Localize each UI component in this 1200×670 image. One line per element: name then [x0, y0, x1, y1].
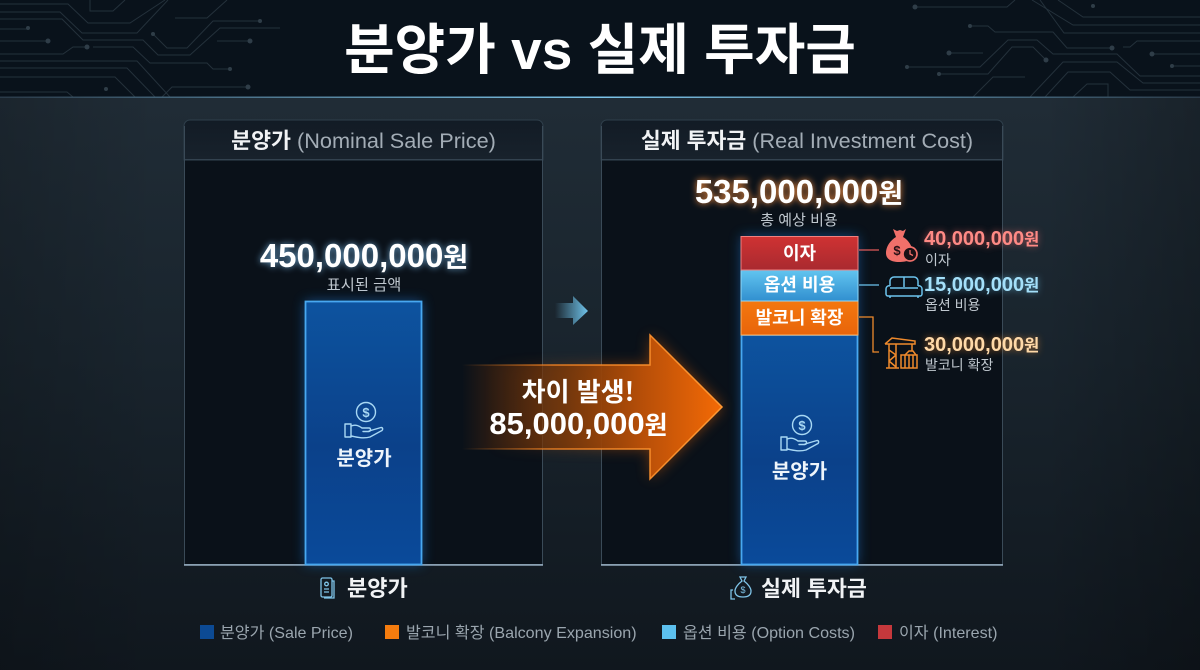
callout: balcony expansion: 발코니 확장 — [925, 355, 993, 375]
value label — [260, 236, 468, 295]
segment: option costs: 옵션 비용 — [764, 271, 835, 297]
callout: interest: 40,000,000원 — [924, 226, 1039, 250]
divider — [0, 96, 1200, 98]
callout: interest: 이자 — [925, 250, 951, 270]
value label: 450,000,000원 — [260, 236, 468, 275]
callout: interest: 40,000,000원 — [924, 226, 1039, 250]
segment: balcony expansion — [741, 301, 858, 335]
stacked bar — [741, 236, 858, 564]
icon: document — [321, 578, 334, 598]
bar: sale price — [305, 301, 422, 564]
callout: balcony expansion: 30,000,000원 — [924, 332, 1039, 356]
panel: real investment cost — [601, 120, 1039, 566]
arrow: difference — [462, 335, 722, 479]
icon: hand with coin: $ — [798, 418, 806, 433]
total label — [695, 172, 903, 230]
segment: option costs — [741, 270, 858, 301]
legend — [200, 619, 998, 643]
segment: sale price — [742, 335, 858, 564]
header band with circuit pattern — [0, 0, 1200, 97]
value label: 표시된 금액 — [327, 273, 401, 295]
legend item: sale price: 분양가 (Sale Price) — [220, 619, 353, 643]
panel header: 분양가 (Nominal Sale Price) — [231, 124, 496, 155]
panel header — [601, 120, 1003, 160]
panel header — [184, 120, 543, 160]
icon: hand with money bag: $ — [740, 585, 746, 595]
total label: 535,000,000원 — [695, 172, 903, 211]
segment: interest: 이자 — [783, 240, 816, 266]
total label: 총 예상 비용 — [760, 209, 838, 230]
icon: hand with coin: $ — [362, 405, 370, 420]
callout: option costs: 15,000,000원 — [924, 272, 1039, 296]
axis label: sale price: 분양가 — [347, 571, 408, 603]
icon: hand with coin — [345, 402, 383, 438]
icon: crane and building — [885, 338, 917, 368]
callout: balcony expansion — [859, 317, 1039, 375]
callout: option costs — [859, 272, 1039, 315]
legend item: interest: 이자 (Interest) — [899, 619, 998, 643]
callout: interest — [859, 226, 1039, 270]
icon: money bag and clock: $ — [893, 243, 901, 258]
total label: 535,000,000원 — [695, 172, 903, 211]
callout: option costs: 15,000,000원 — [924, 272, 1039, 296]
arrow: small blue — [555, 296, 588, 325]
callout: balcony expansion: 30,000,000원 — [924, 332, 1039, 356]
legend item: options: 옵션 비용 (Option Costs) — [683, 619, 855, 643]
axis label: real investment: 실제 투자금 — [761, 572, 867, 603]
value label: 450,000,000원 — [260, 236, 468, 275]
arrow: difference: 85,000,000원 — [489, 406, 668, 442]
panel header: 실제 투자금 (Real Investment Cost) — [641, 124, 973, 155]
segment: sale price: 분양가 — [772, 455, 827, 484]
icon: hand with coin — [781, 416, 819, 451]
arrow: difference: 차이 발생! — [522, 372, 634, 409]
segment: balcony expansion: 발코니 확장 — [756, 304, 844, 330]
segment: interest — [741, 236, 858, 270]
title: 분양가 vs 실제 투자금 — [344, 19, 856, 81]
panel: nominal sale price — [184, 120, 543, 566]
bar: sale price: 분양가 — [336, 442, 392, 471]
icon: money bag and clock — [886, 229, 917, 262]
callout: option costs: 옵션 비용 — [925, 295, 981, 315]
legend item: balcony: 발코니 확장 (Balcony Expansion) — [406, 619, 637, 643]
icon: sofa — [886, 277, 922, 298]
